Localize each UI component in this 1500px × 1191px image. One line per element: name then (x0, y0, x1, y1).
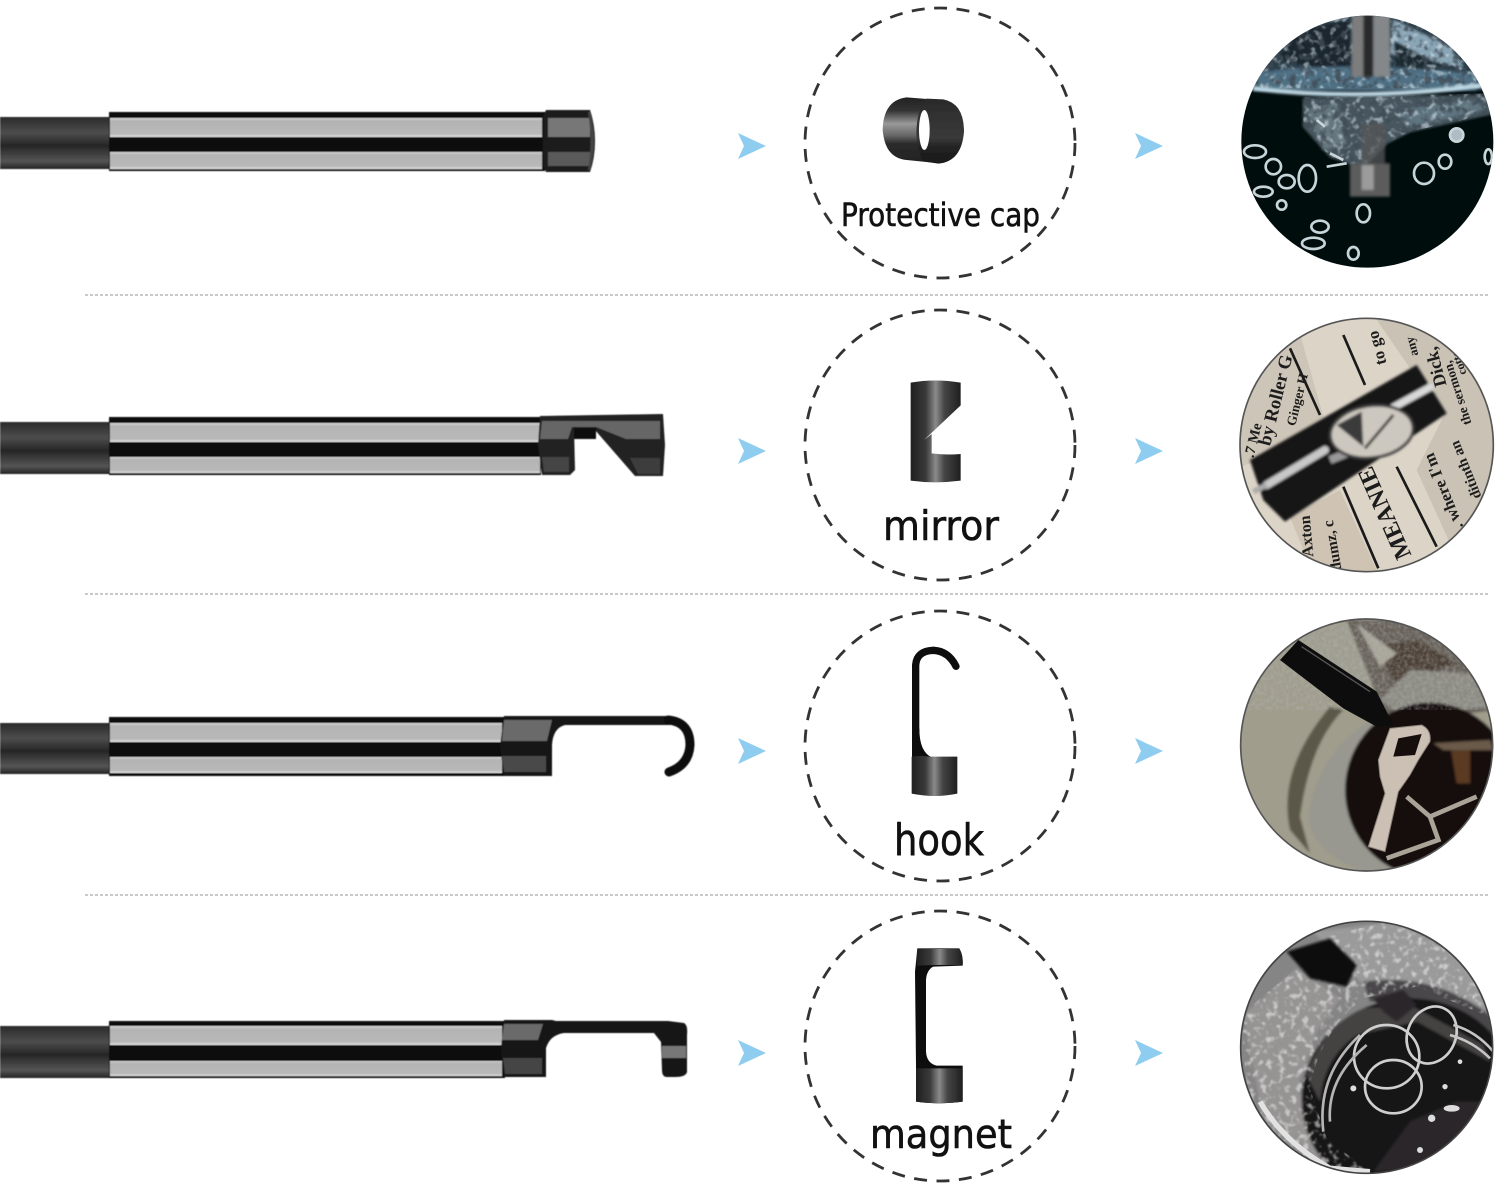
endoscope with mirror tip (0, 414, 665, 476)
arrow: row 3 to photo (1135, 738, 1163, 764)
label: hook: hook (894, 815, 984, 866)
endoscope with magnet tip (0, 1020, 687, 1078)
icon: mirror (911, 380, 961, 482)
newspaper text: by Roller G (1254, 353, 1297, 448)
icon: protective cap (883, 97, 964, 164)
photo: hook lifting key (1240, 618, 1494, 872)
newspaper text: . where I'm (1419, 450, 1467, 532)
label: mirror: mirror (883, 502, 999, 550)
newspaper text: .7 Me (1242, 421, 1266, 459)
arrow: row 2 to photo (1135, 438, 1163, 464)
newspaper text: the sermon, (1440, 359, 1475, 427)
endoscope with hook tip (0, 716, 690, 776)
newspaper text: Dick, (1421, 345, 1451, 389)
arrow: row 1 to photo (1135, 133, 1163, 159)
newspaper text (1242, 329, 1485, 572)
key (1368, 725, 1430, 852)
photo: magnet lifting rings (1240, 920, 1494, 1174)
arrow: row 4 to photo (1135, 1040, 1163, 1066)
newspaper text: MEANIE (1353, 462, 1417, 563)
endoscope with protective cap (0, 110, 595, 172)
icon: hook (912, 650, 957, 796)
newspaper text: Ginger H (1283, 371, 1311, 427)
panel: protective cap accessory (805, 8, 1075, 278)
panel: magnet accessory (805, 911, 1075, 1181)
photo: cap under water (1230, 10, 1500, 277)
label: magnet: magnet (870, 1112, 1012, 1158)
arrow: row 1 to cap (738, 133, 766, 159)
newspaper text: to go (1363, 329, 1391, 367)
panel: hook accessory (805, 611, 1075, 881)
arrow: row 2 to mirror (738, 438, 766, 464)
newspaper text: ditinth an (1447, 438, 1485, 501)
arrow: row 4 to magnet (738, 1040, 766, 1066)
icon: magnet (915, 948, 963, 1103)
newspaper text: Axton (1297, 515, 1317, 558)
newspaper text: any (1402, 335, 1421, 358)
newspaper text: dumz, c (1320, 519, 1346, 572)
newspaper text: cotton (1445, 342, 1469, 377)
photo: mirror over newspaper (1239, 318, 1494, 572)
panel: mirror accessory (805, 310, 1075, 580)
arrow: row 3 to hook (738, 738, 766, 764)
label: Protective cap: Protective cap (841, 196, 1040, 234)
